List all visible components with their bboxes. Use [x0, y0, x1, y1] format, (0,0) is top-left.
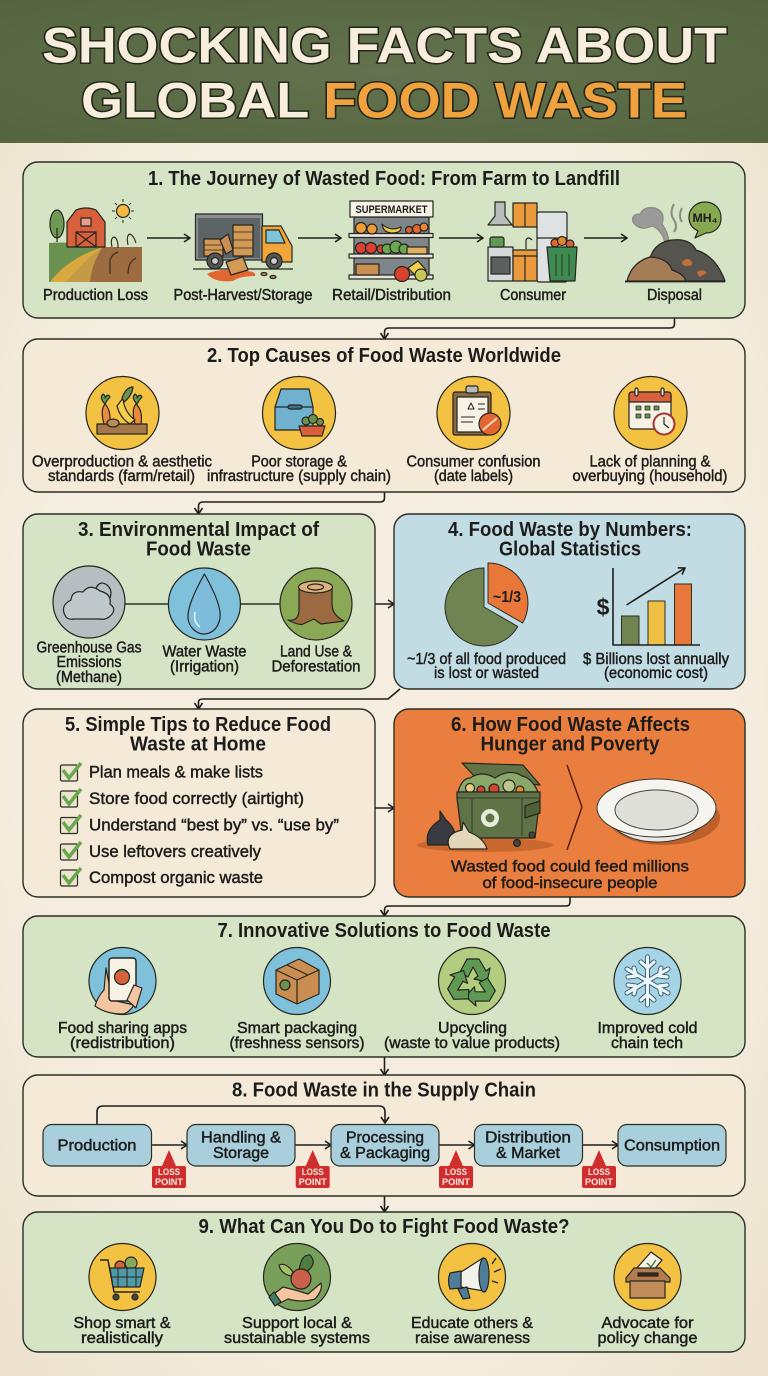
loss point tag 1: LOSS [158, 1167, 180, 1177]
icon: smart package [264, 948, 330, 1014]
panel 2: top causes [23, 339, 745, 492]
label: educate others [411, 1315, 534, 1347]
checklist item 2: Store food correctly (airtight) [89, 789, 304, 808]
label: production loss: Production Loss [43, 287, 148, 304]
icon: truck [193, 214, 293, 281]
panel 3: environmental impact [23, 514, 375, 689]
heading 5 [65, 713, 331, 756]
label: water waste [162, 644, 246, 676]
icon: shopping cart [89, 1244, 156, 1310]
connector: supply chain to actions [384, 1196, 386, 1212]
step: consumption [618, 1124, 726, 1166]
label: water waste: Water Waste [162, 644, 246, 661]
heading 9: 9. What Can You Do to Fight Food Waste? [198, 1215, 570, 1238]
icon: overflowing dumpster [417, 763, 553, 852]
icon: megaphone [438, 1244, 506, 1310]
label: billions lost: $ Billions lost annually [583, 651, 729, 668]
panel 7: innovative solutions [23, 916, 745, 1057]
icon: empty plate [597, 779, 720, 845]
label: land use: Land Use & [280, 644, 353, 661]
icon: calendar and clock [614, 376, 687, 450]
flow arrow [152, 1144, 187, 1146]
label: land use [272, 644, 360, 676]
loss point tag 2: POINT [299, 1177, 327, 1187]
label: billions lost [583, 651, 729, 682]
icon: date label clipboard [437, 376, 510, 450]
label: support local: Support local & [242, 1315, 353, 1332]
panel 5: tips [23, 709, 375, 897]
title banner [0, 0, 768, 143]
loss point tag 3: LOSS [445, 1167, 467, 1177]
heading 4: Global Statistics [499, 538, 641, 561]
icon: landfill with methane [625, 202, 725, 282]
icon: ballot box [614, 1244, 681, 1310]
heading 3: Food Waste [146, 538, 251, 561]
connector: solutions to supply chain [384, 1057, 386, 1075]
panel 4: statistics [394, 514, 745, 689]
label: land use: Deforestation [272, 659, 360, 676]
label: post-harvest: Post-Harvest/Storage [174, 287, 312, 304]
checklist item 3: Understand “best by” vs. “use by” [89, 816, 339, 835]
step: distribution and market: & Market [496, 1145, 561, 1162]
step: production: Production [58, 1138, 136, 1155]
loss point tag 2 [296, 1150, 330, 1188]
divider chevron [567, 765, 582, 850]
label: consumer: Consumer [500, 287, 566, 304]
arrow [298, 237, 341, 239]
panel 6: hunger and poverty [394, 709, 745, 897]
label: cold chain [598, 1020, 698, 1052]
loss point tag 4: LOSS [588, 1167, 610, 1177]
label: greenhouse gas [36, 640, 142, 686]
label: food sharing [58, 1020, 187, 1052]
label: smart packaging [230, 1020, 364, 1052]
label: advocate: Advocate for [602, 1315, 694, 1332]
title banner: SHOCKING FACTS ABOUT [42, 18, 727, 74]
arrow [147, 237, 190, 239]
loss point tag 3 [439, 1150, 473, 1188]
icon: recycling [438, 948, 506, 1014]
label: upcycling: Upcycling [438, 1020, 507, 1037]
loss point tag 2: LOSS [302, 1167, 324, 1177]
heading 2: 2. Top Causes of Food Waste Worldwide [207, 344, 561, 367]
label: educate others: raise awareness [415, 1330, 530, 1347]
label: lack of planning: Lack of planning & [590, 454, 711, 470]
step: handling and storage: Storage [213, 1145, 269, 1162]
icon: landfill with methane: MH₄ [692, 213, 718, 225]
loss point tag 1 [152, 1150, 186, 1188]
label: food sharing: Food sharing apps [58, 1020, 187, 1037]
label: greenhouse gas: Greenhouse Gas [36, 640, 142, 657]
flow arrow [582, 1144, 618, 1146]
heading 8: 8. Food Waste in the Supply Chain [232, 1079, 536, 1102]
heading 5: Waste at Home [130, 733, 266, 756]
label: greenhouse gas: (Methane) [56, 669, 122, 686]
label: advocate [598, 1315, 698, 1347]
heading 6: 6. How Food Waste Affects [451, 713, 690, 736]
connector: causes to environmental impact [198, 492, 384, 514]
label: smart packaging: Smart packaging [237, 1020, 357, 1037]
label: advocate: policy change [598, 1330, 698, 1347]
heading 3 [78, 518, 319, 561]
icon: water drop [168, 568, 240, 640]
icon: methane cloud [53, 566, 125, 638]
label: educate others: Educate others & [411, 1315, 534, 1332]
step: production [43, 1124, 152, 1166]
label: support local [224, 1315, 370, 1347]
icon: tree stump [280, 568, 352, 640]
label: cold chain: chain tech [611, 1035, 683, 1052]
loss point tag 4: POINT [585, 1177, 613, 1187]
icon: kitchen [488, 202, 577, 282]
label: infrastructure: infrastructure (supply chain) [207, 468, 391, 485]
label: consumer confusion: Consumer confusion [406, 454, 540, 470]
bypass arrow [97, 1106, 385, 1124]
label: water waste: (Irrigation) [170, 659, 239, 676]
connector: hunger to solutions [384, 897, 570, 916]
arrow: tips to hunger [375, 807, 394, 809]
label: disposal: Disposal [647, 287, 702, 304]
icon: food sharing app [89, 948, 156, 1014]
label: retail: Retail/Distribution [332, 287, 451, 304]
step: handling and storage: Handling & [201, 1130, 282, 1147]
flow arrow [439, 1144, 474, 1146]
step: distribution and market [474, 1124, 582, 1166]
step: consumption: Consumption [624, 1138, 720, 1155]
loss point tag 1: POINT [155, 1177, 183, 1187]
icon: farm [49, 199, 142, 282]
heading 1: 1. The Journey of Wasted Food: From Farm to Landfill [148, 167, 620, 190]
label: shop smart [74, 1315, 171, 1347]
loss point tag 4 [582, 1150, 616, 1188]
panel 1: journey of wasted food [23, 162, 745, 318]
checklist item 1: Plan meals & make lists [89, 763, 263, 782]
arrow [584, 237, 627, 239]
step: handling and storage [187, 1124, 295, 1166]
label: food sharing: (redistribution) [70, 1035, 175, 1052]
label: date labels: (date labels) [434, 468, 513, 485]
step: processing and packaging: & Packaging [340, 1145, 430, 1162]
icon: supermarket: SUPERMARKET [356, 204, 428, 216]
heading 7: 7. Innovative Solutions to Food Waste [218, 919, 550, 942]
icon: supermarket [349, 201, 433, 282]
label: support local: sustainable systems [224, 1330, 370, 1347]
heading 6: Hunger and Poverty [480, 733, 660, 756]
panel 8: supply chain [23, 1075, 745, 1196]
checklist item 5: Compost organic waste [89, 868, 263, 887]
label: upcycling: (waste to value products) [384, 1035, 560, 1052]
label: overproduction: Overproduction & aesthetic [32, 454, 212, 470]
heading 5: 5. Simple Tips to Reduce Food [65, 713, 331, 736]
step: processing and packaging: Processing [346, 1130, 424, 1147]
pie chart: ~1/3 [493, 589, 521, 606]
bar chart: $ [597, 594, 610, 620]
caption: of food-insecure people [482, 875, 658, 892]
heading 4 [448, 518, 692, 561]
loss point tag 3: POINT [442, 1177, 470, 1187]
pie chart [445, 563, 528, 646]
step: distribution and market: Distribution [485, 1130, 571, 1147]
label: overbuying: overbuying (household) [572, 468, 728, 485]
label: cold chain: Improved cold [598, 1020, 698, 1037]
label: shop smart: realistically [81, 1330, 163, 1347]
panel 9: what you can do [23, 1212, 745, 1352]
label: upcycling [384, 1020, 560, 1052]
label: greenhouse gas: Emissions [56, 654, 122, 671]
heading 3: 3. Environmental Impact of [78, 518, 319, 541]
icon: hand holding produce [264, 1244, 330, 1310]
label: standards: standards (farm/retail) [48, 468, 195, 485]
heading 4: 4. Food Waste by Numbers: [448, 518, 692, 541]
label: smart packaging: (freshness sensors) [230, 1035, 364, 1052]
arrow: impact to numbers [375, 603, 394, 605]
label: one third: ~1/3 of all food produced [407, 651, 566, 668]
arrow [439, 237, 483, 239]
icon: overproduction produce [86, 376, 159, 450]
flow arrow [295, 1144, 331, 1146]
bar chart [597, 568, 700, 645]
checklist item 4: Use leftovers creatively [89, 842, 261, 861]
icon: snowflake [614, 948, 681, 1014]
caption: Wasted food could feed millions [451, 859, 689, 876]
label: poor storage: Poor storage & [251, 454, 347, 470]
label: billions lost: (economic cost) [604, 665, 708, 682]
label: one third: is lost or wasted [434, 665, 539, 682]
label: one third [407, 651, 566, 682]
step: processing and packaging [331, 1124, 439, 1166]
connector: disposal to causes [384, 318, 674, 339]
heading 6 [451, 713, 690, 756]
label: shop smart: Shop smart & [74, 1315, 171, 1332]
caption [451, 859, 689, 892]
icon: storage box [262, 376, 336, 450]
title banner: GLOBAL FOOD WASTE [81, 72, 687, 128]
connector: statistics to tips [198, 689, 400, 709]
